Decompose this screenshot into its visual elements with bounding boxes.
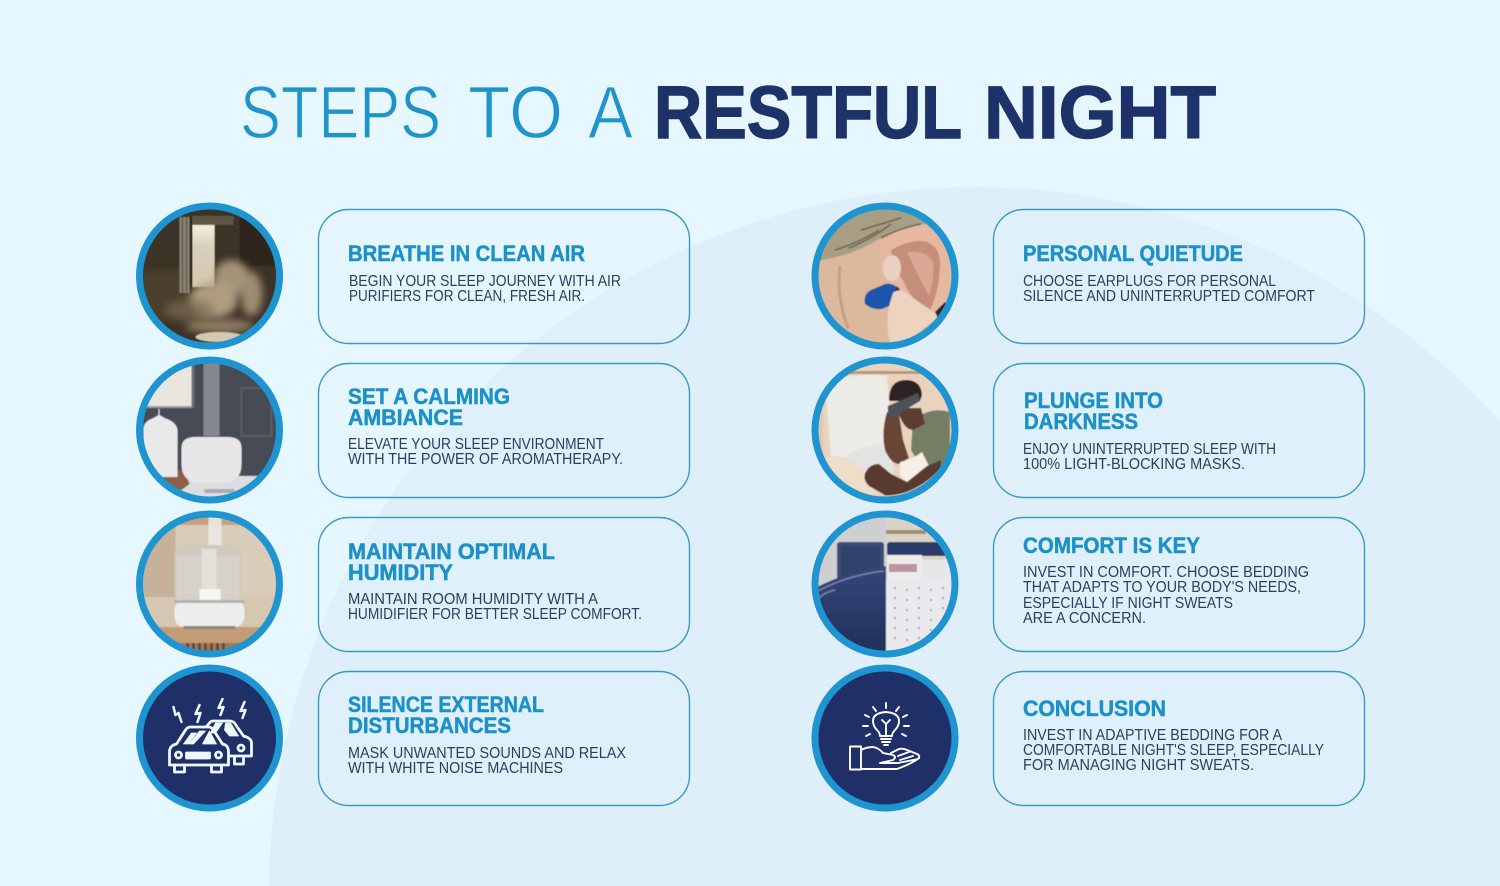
ring — [815, 360, 955, 500]
photo: ear with earplug — [815, 206, 955, 346]
heading: AMBIANCE — [348, 405, 463, 430]
body text: FOR MANAGING NIGHT SWEATS. — [1023, 757, 1254, 774]
photo: bedding — [815, 514, 956, 656]
body text: WITH WHITE NOISE MACHINES — [348, 760, 563, 777]
panel: plunge into darkness — [994, 364, 1364, 498]
heading — [1024, 388, 1163, 434]
heading: CONCLUSION — [1023, 696, 1166, 721]
body text: INVEST IN COMFORT. CHOOSE BEDDING — [1023, 564, 1309, 581]
panel: personal quietude — [994, 210, 1364, 344]
heading: PLUNGE INTO — [1024, 388, 1163, 413]
panel: conclusion — [994, 672, 1364, 806]
ring — [815, 514, 955, 654]
panel: set a calming ambiance — [318, 364, 690, 498]
ring — [140, 514, 280, 654]
title: NIGHT — [984, 71, 1216, 154]
body text: PURIFIERS FOR CLEAN, FRESH AIR. — [349, 288, 585, 305]
panel: breathe in clean air — [318, 210, 690, 344]
body text: ELEVATE YOUR SLEEP ENVIRONMENT — [348, 436, 604, 453]
ring — [140, 360, 280, 500]
bulb and hand icon — [850, 703, 919, 770]
body text — [1023, 273, 1315, 305]
photo: aroma diffusers — [140, 360, 280, 506]
body text: HUMIDIFIER FOR BETTER SLEEP COMFORT. — [348, 606, 642, 623]
body text: ARE A CONCERN. — [1023, 610, 1146, 627]
body text — [1023, 727, 1324, 774]
heading: COMFORT IS KEY — [1023, 533, 1200, 558]
heading — [348, 692, 544, 738]
body text — [348, 591, 642, 623]
body text — [348, 745, 627, 777]
body text — [1023, 564, 1309, 627]
body text: CHOOSE EARPLUGS FOR PERSONAL — [1023, 273, 1276, 290]
heading — [348, 539, 555, 585]
heading: PERSONAL QUIETUDE — [1023, 241, 1243, 266]
ring — [815, 206, 955, 346]
heading: MAINTAIN OPTIMAL — [348, 539, 555, 564]
body text: MAINTAIN ROOM HUMIDITY WITH A — [348, 591, 599, 608]
car icons — [170, 699, 252, 772]
body text: THAT ADAPTS TO YOUR BODY'S NEEDS, — [1023, 579, 1301, 596]
heading: DISTURBANCES — [348, 713, 511, 738]
body text: BEGIN YOUR SLEEP JOURNEY WITH AIR — [349, 273, 621, 290]
panel: silence external disturbances — [318, 672, 690, 806]
body text: ENJOY UNINTERRUPTED SLEEP WITH — [1023, 441, 1276, 458]
title: RESTFUL — [654, 71, 962, 154]
icon: light bulb over hand — [815, 668, 955, 808]
title: TO — [468, 71, 563, 154]
panel: comfort is key — [994, 518, 1364, 652]
body text: SILENCE AND UNINTERRUPTED COMFORT — [1023, 288, 1315, 305]
body text — [1023, 441, 1276, 473]
body text — [349, 273, 621, 305]
title — [240, 71, 1216, 154]
icon: cars with noise — [140, 668, 280, 808]
body text: WITH THE POWER OF AROMATHERAPY. — [348, 451, 623, 468]
heading: DARKNESS — [1024, 409, 1138, 434]
photo: dusty room — [140, 206, 280, 346]
panel: maintain optimal humidity — [318, 518, 690, 652]
photo: man with sleep mask — [815, 360, 955, 500]
title: STEPS — [240, 71, 441, 154]
heading: SILENCE EXTERNAL — [348, 692, 544, 717]
body text: ESPECIALLY IF NIGHT SWEATS — [1023, 595, 1233, 612]
body text: MASK UNWANTED SOUNDS AND RELAX — [348, 745, 627, 762]
photo: humidifier — [140, 514, 280, 655]
heading: HUMIDITY — [348, 560, 453, 585]
ring — [140, 206, 280, 346]
body text — [348, 436, 623, 468]
heading — [348, 384, 510, 430]
heading: SET A CALMING — [348, 384, 510, 409]
body text: 100% LIGHT-BLOCKING MASKS. — [1023, 456, 1245, 473]
heading: BREATHE IN CLEAN AIR — [348, 241, 585, 266]
body text: INVEST IN ADAPTIVE BEDDING FOR A — [1023, 727, 1283, 744]
body text: COMFORTABLE NIGHT'S SLEEP, ESPECIALLY — [1023, 742, 1324, 759]
title: A — [588, 71, 634, 154]
background circle — [269, 187, 1500, 886]
